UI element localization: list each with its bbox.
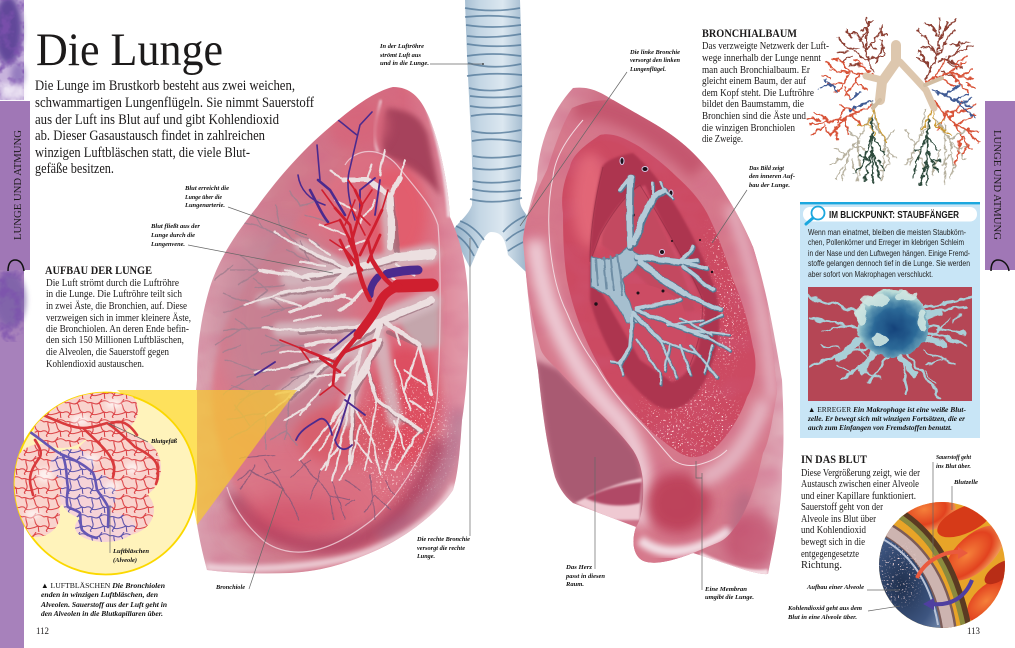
left lung (page right): [520, 80, 790, 580]
side tab right: Lunge und Atmung: [985, 101, 1015, 271]
heading and body: Bronchialbaum: bildet den Baumstamm, die: [702, 99, 804, 110]
heading and body: Aufbau der Lunge: die Alveolen, die Sauerstoff gegen: [46, 347, 170, 358]
vessel wall: [899, 512, 970, 625]
artery red: [280, 180, 432, 395]
callout: Aufbau einer Alveole: Aufbau einer Alveole: [806, 584, 864, 591]
caption: Luftbläschen: ▲ LUFTBLÄSCHEN Die Bronchiolen: [41, 581, 165, 590]
callout: Kohlendioxid: [787, 605, 900, 621]
intro text: winzigen Luftbläschen statt, die viele Blut-: [35, 145, 250, 161]
heading and body: Bronchialbaum: wege innerhalb der Lunge nennt: [702, 53, 821, 64]
callout: Sauerstoff: ins Blut über.: [936, 463, 971, 470]
callout: Lungenvene: Blut fließt aus der: [150, 223, 200, 230]
white speckle clusters: [357, 380, 453, 500]
gas exchange circle: [879, 502, 1005, 628]
heading and body: Bronchialbaum: man auch Bronchialbaum. Er: [702, 65, 810, 76]
heading and body: In das Blut: Sauerstoff geht von der: [801, 502, 883, 513]
heading and body: Bronchialbaum: Bronchien sind die Äste und: [702, 110, 807, 122]
bronchiole network (outer, fine): [215, 190, 330, 450]
alveoli magnified circle: Blutgefäß: [150, 438, 178, 445]
label: Blutgefäß: [108, 423, 148, 442]
callout: Herz: [565, 457, 605, 588]
panel text: Wenn man einatmet, bleiben die meisten Staubkörn-: [808, 227, 966, 237]
callout: innerer Aufbau: bau der Lunge.: [749, 182, 790, 189]
yellow magnifier wedge: [117, 390, 297, 525]
callout: Lungenvene: Lungenvene.: [150, 241, 185, 248]
callout: innerer Aufbau: Das Bild zeigt: [748, 165, 784, 172]
heading and body: Aufbau der Lunge: verzweigen sich in immer kleinere Äste,: [46, 312, 191, 324]
heading and body: Bronchialbaum: gleicht einem Baum, der auf: [702, 76, 806, 87]
heading and body: Bronchialbaum: Das verzweigte Netzwerk der Luft-: [702, 41, 829, 52]
intro text: Die Lunge im Brustkorb besteht aus zwei weichen,: [35, 78, 295, 94]
panel: Im Blickpunkt: [800, 202, 980, 438]
callout: Herz: Das Herz: [565, 564, 592, 571]
air holes: [594, 158, 713, 306]
intro text: gefäße besitzen.: [35, 161, 114, 177]
callout: Bronchiole: Bronchiole: [215, 584, 245, 591]
callout: Lungenarterie: Lungenarterie.: [184, 202, 225, 209]
posterior lobe lower right: [724, 512, 780, 568]
heading and body: In das Blut: und Kohlendioxid: [801, 525, 867, 536]
panel text: chen, Pollenkörner und Erreger im klebrigen Schleim: [808, 237, 964, 247]
callout: Herz: Raum.: [565, 581, 584, 588]
callout: rechte Bronchie: [416, 238, 470, 560]
intro text: ab. Dieser Gasaustausch findet in zahlreichen: [35, 128, 265, 144]
caption: Erreger: zelle. Er bewegt sich mit winzigen Fortsätzen, die er: [807, 414, 965, 423]
red blood cells: [904, 502, 956, 530]
side tab right: Lunge und Atmung: LUNGE UND ATMUNG: [991, 130, 1002, 240]
callout: Blutzelle: Blutzelle: [953, 479, 978, 486]
heading and body: Aufbau der Lunge: den sich 150 Millionen Luftbläschen,: [46, 335, 184, 346]
dark green lower: [855, 118, 940, 185]
panel text: [808, 227, 970, 279]
caption: Luftbläschen: den Alveolen in die Blutkapillaren über.: [41, 609, 163, 618]
callout: Blutzelle: [952, 479, 978, 510]
callout: innerer Aufbau: den inneren Auf-: [749, 173, 795, 180]
heading and body: Aufbau der Lunge: die Bronchiolen. An deren Ende befin-: [46, 324, 189, 335]
callout: Kohlendioxid: Kohlendioxid geht aus dem: [787, 605, 862, 612]
caption: Luftbläschen: enden in winzigen Luftbläschen, den: [41, 590, 158, 599]
gold: [858, 108, 952, 143]
heading and body: Bronchialbaum: BRONCHIALBAUM: [702, 28, 797, 40]
main cast trunk: [880, 45, 896, 100]
callout: Lungenarterie: [184, 185, 307, 235]
heading and body: Aufbau der Lunge: AUFBAU DER LUNGE: [45, 265, 152, 277]
callout: Sauerstoff: [933, 454, 971, 557]
callout: innerer Aufbau: [712, 165, 795, 243]
caption: Luftbläschen: [40, 581, 167, 618]
caption: Erreger: ▲ ERREGER Ein Makrophage ist eine weiße Blut-: [808, 405, 967, 414]
alveolar blue space: [879, 537, 941, 628]
callout: Luftröhre: [379, 43, 484, 67]
blue bronchi tree: [591, 177, 731, 385]
heading and body: Bronchialbaum: die winzigen Bronchiolen: [702, 123, 796, 134]
brown upper: [838, 18, 972, 80]
callout: Membran: Eine Membran: [704, 586, 747, 593]
callout: rechte Bronchie: versorgt die rechte: [417, 545, 465, 552]
heart cavity: [535, 360, 643, 520]
highlights: [25, 399, 141, 519]
callout: Lungenvene: Lunge durch die: [150, 232, 195, 239]
callout: Bronchiole: [215, 488, 283, 591]
soft underlay of tree mass: [262, 195, 430, 420]
sliced tissue: [562, 134, 756, 458]
callout: Lungenarterie: Lunge über die: [184, 194, 222, 201]
blue right: [820, 80, 975, 118]
intro text: aus der Luft ins Blut auf und gibt Kohlendioxid: [35, 112, 279, 128]
white bronchial tree: [245, 150, 432, 480]
alveoli magnified circle: Luftbläschen: [112, 548, 149, 555]
bronchial tree cast photo: [808, 18, 978, 185]
callout: linke Bronchie: [520, 49, 680, 226]
heading and body: Aufbau der Lunge: Kohlendioxid austauschen.: [46, 359, 144, 370]
panel text: in der Nase und den Luftwegen hängen. Einige Fremd-: [808, 248, 970, 258]
heading and body: Aufbau der Lunge: in die Lunge. Die Luftröhre teilt sich: [46, 289, 183, 300]
inner cavity surfaces: [590, 153, 719, 409]
heading and body: Aufbau der Lunge: Die Luft strömt durch die Luftröhre: [46, 278, 179, 289]
right lung (page left): [190, 80, 475, 580]
gray fine lower: [830, 100, 968, 185]
trachea: [452, 0, 530, 272]
panel text: stoffe gelangen dennoch tief in die Lunge. Sie werden: [808, 258, 970, 268]
callout: Lungenvene: [150, 223, 333, 273]
heading and body: In das Blut: Alveole ins Blut über: [801, 514, 876, 525]
page number 113: 113: [967, 627, 980, 637]
intro text: [35, 78, 314, 177]
callout: Luftröhre: In der Luftröhre: [379, 43, 424, 50]
callout: Lungenarterie: Blut erreicht die: [184, 185, 229, 192]
callout: linke Bronchie: versorgt den linken: [630, 57, 680, 64]
icon: breath arc right: [991, 260, 1009, 271]
red left: [808, 56, 978, 165]
callout: Sauerstoff: Sauerstoff geht: [936, 454, 971, 461]
yellow wedge outside lung: [117, 390, 197, 525]
panel text: aber sofort von Makrophagen verschluckt.: [808, 269, 933, 279]
callout: Herz: passt in diesen: [565, 573, 605, 580]
heading and body: In das Blut: IN DAS BLUT: [801, 454, 867, 466]
heading and body: In das Blut: Diese Vergrößerung zeigt, wie der: [801, 468, 920, 479]
air sacs: [10, 390, 161, 537]
page number 112: 112: [36, 627, 49, 637]
label: Luftbläschen: [109, 505, 111, 553]
heading and body: In das Blut: Austausch zwischen einer Alveole: [801, 479, 919, 490]
side tab left: Lunge und Atmung: [0, 101, 30, 271]
callout: Aufbau einer Alveole: [806, 584, 900, 591]
heading and body: Aufbau der Lunge: [45, 265, 191, 370]
membrane outline: [227, 151, 440, 552]
icon: breath arc left: [8, 260, 24, 271]
cut lung tissue: [212, 153, 441, 534]
callout: Membran: [696, 461, 754, 601]
blue arrow: [923, 580, 972, 610]
caption: Erreger: [807, 405, 967, 432]
caption: Luftbläschen: Alveolen. Sauerstoff aus der Luft geht in: [40, 600, 167, 609]
callout: linke Bronchie: Lungenflügel.: [629, 66, 666, 73]
heading and body: In das Blut: [801, 454, 920, 571]
heading and body: Bronchialbaum: die Zweige.: [702, 134, 743, 145]
side tab left: Lunge und Atmung: LUNGE UND ATMUNG: [13, 130, 24, 240]
callout: linke Bronchie: Die linke Bronchie: [629, 49, 680, 56]
left purple margin strip with X-ray image: [0, 0, 26, 648]
intro text: schwammartigen Lungenflügeln. Sie nimmt Sauerstoff: [35, 95, 314, 111]
heading and body: Bronchialbaum: [702, 28, 829, 145]
main vessels: [30, 415, 158, 538]
heading and body: In das Blut: Richtung.: [801, 560, 842, 571]
lower dark band: [232, 440, 440, 546]
heading and body: Bronchialbaum: dem Kopf steht. Die Luftröhre: [702, 88, 814, 99]
icon: magnifier: [806, 206, 824, 224]
heading and body: In das Blut: bewegt sich in die: [801, 537, 865, 548]
heading and body: Aufbau der Lunge: in zwei Äste, die Bronchien, auf. Diese: [46, 300, 187, 312]
caption: Erreger: auch zum Einfangen von Fremdstoffen benutzt.: [808, 423, 952, 432]
callout: rechte Bronchie: Die rechte Bronchie: [416, 536, 470, 543]
title: Die Lunge: [36, 24, 223, 76]
panel: Im Blickpunkt: IM BLICKPUNKT: STAUBFÄNGER: [829, 208, 960, 221]
alveoli magnified circle: [10, 390, 196, 574]
red arrow: [917, 547, 968, 578]
callout: Luftröhre: strömt Luft aus: [379, 52, 421, 59]
alveoli magnified circle: (Alveole): [113, 557, 137, 564]
heading and body: In das Blut: und einer Kapillare funktioniert.: [801, 491, 916, 502]
upper lobe back, dark inner surface: [381, 108, 441, 197]
heading and body: In das Blut: entgegengesetzte: [801, 549, 859, 560]
veins purple: [255, 112, 418, 449]
callout: Luftröhre: und in die Lunge.: [380, 60, 429, 67]
callout: Membran: umgibt die Lunge.: [705, 594, 754, 601]
membrane line: [549, 120, 727, 465]
macrophage photo: [808, 287, 972, 401]
callout: rechte Bronchie: Lunge.: [416, 553, 435, 560]
front lobe: [520, 90, 790, 570]
callout: Kohlendioxid: Blut in eine Alveole über.: [787, 614, 857, 621]
